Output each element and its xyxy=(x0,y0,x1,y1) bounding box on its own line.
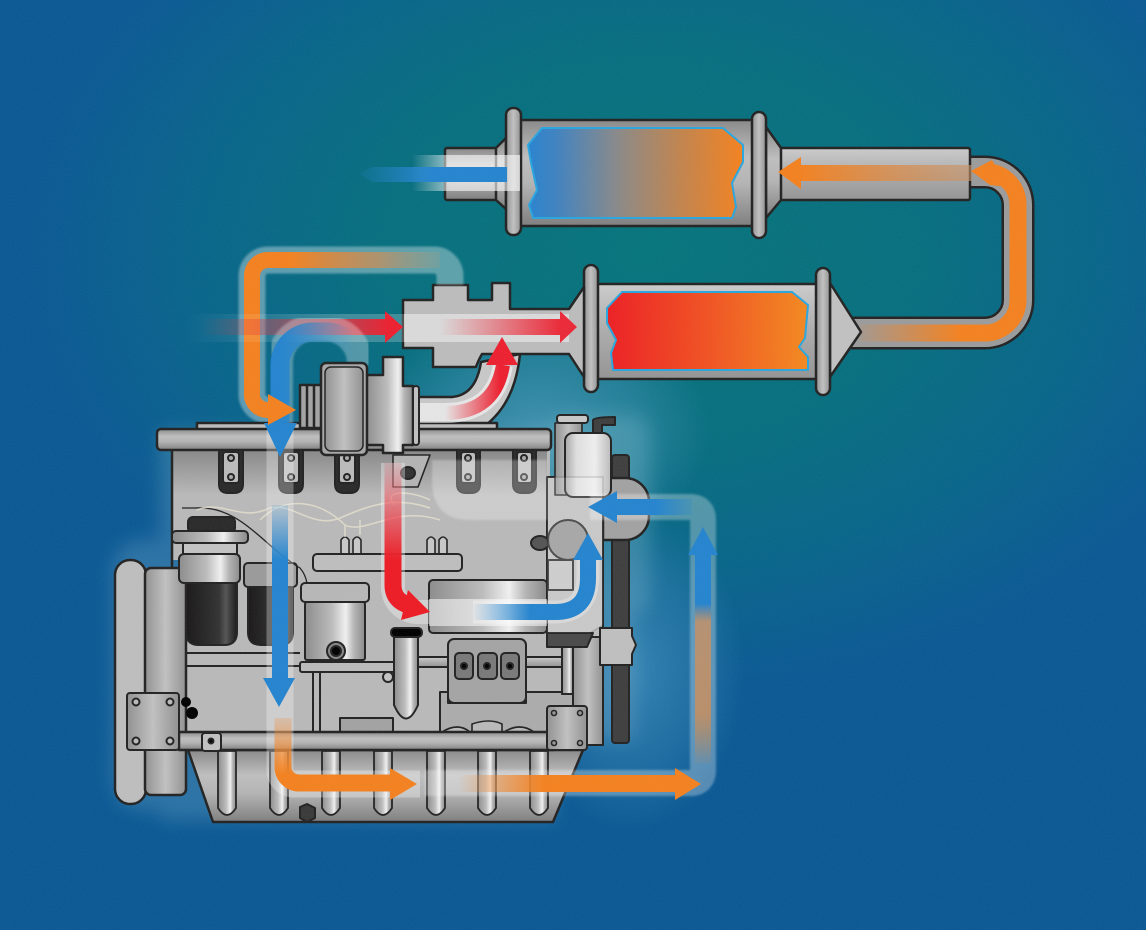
translucent water jacket overlay xyxy=(429,460,603,633)
rising fading arrow orange to blue xyxy=(688,527,718,763)
red curved arrow head xyxy=(486,337,518,365)
exhaust pipe from turbo xyxy=(418,354,520,428)
coolant neck xyxy=(555,415,588,495)
lower block step xyxy=(340,718,393,732)
radiator dark bar xyxy=(612,455,629,743)
cooler white band xyxy=(429,599,547,626)
black oil holes xyxy=(181,697,198,719)
dark nub xyxy=(531,536,549,550)
post xyxy=(562,647,573,694)
socket left xyxy=(455,653,473,679)
white blue flow vertical band and red drop halo xyxy=(280,430,703,784)
blue left arrow into housing xyxy=(588,491,692,523)
lower filter substrate red to orange xyxy=(607,292,808,370)
crank pulley xyxy=(115,560,146,804)
right tab xyxy=(600,628,636,665)
turbine cover xyxy=(325,367,363,451)
inlet pipe orange arrow xyxy=(778,157,972,189)
oil tube xyxy=(394,637,418,718)
block horizontal lines xyxy=(186,653,320,732)
oil pan xyxy=(188,750,583,822)
orange down-then-right arrow xyxy=(283,718,417,800)
socket middle xyxy=(478,653,497,679)
clamp 4 xyxy=(457,450,480,493)
filter 3 xyxy=(301,583,369,660)
red intake arrow xyxy=(185,311,405,343)
right dark foot xyxy=(547,633,593,647)
compressor xyxy=(366,357,413,453)
valve cover rear strip xyxy=(197,423,497,430)
filter 2 xyxy=(244,563,297,645)
engine block xyxy=(172,450,578,732)
manifold body xyxy=(403,283,584,377)
electrical box xyxy=(448,639,526,703)
blue curved arrow from cooler xyxy=(473,533,603,612)
manifold white flow band xyxy=(404,314,569,342)
red arrow to cooler xyxy=(393,463,430,620)
upper unit outlet cone xyxy=(496,138,506,209)
long orange arrow under engine xyxy=(458,768,701,800)
clamp 1 xyxy=(219,450,243,493)
upper unit inlet cone xyxy=(766,127,781,218)
right bracket xyxy=(547,706,587,750)
upper unit inlet pipe xyxy=(778,148,970,200)
dark hose hook xyxy=(593,417,615,433)
flange xyxy=(413,386,419,445)
injector rail xyxy=(313,537,462,571)
lower rail xyxy=(179,732,554,750)
block shading xyxy=(172,450,547,495)
upper filter substrate blue to orange xyxy=(528,128,743,218)
wiring harness xyxy=(197,493,440,537)
lower unit cone outlet xyxy=(830,283,861,377)
lower unit body xyxy=(596,284,818,379)
lower bumps xyxy=(442,721,534,732)
lower unit left flange xyxy=(584,265,598,392)
engine soft glow xyxy=(112,415,650,820)
turbine housing xyxy=(321,363,367,455)
fan hub xyxy=(145,568,186,795)
oil pan ribs xyxy=(218,751,548,815)
upper unit left flange xyxy=(506,108,521,235)
small bracket xyxy=(202,733,221,751)
back of intake pipe and turbo xyxy=(197,385,497,430)
mixer manifold and turbo exhaust pipe xyxy=(403,283,584,428)
connector orange flow xyxy=(860,172,1018,333)
round pump housing xyxy=(603,478,649,540)
blue arch head xyxy=(264,423,297,457)
turbo mount xyxy=(393,455,430,487)
support plate xyxy=(300,662,418,672)
clamp 5 xyxy=(513,450,536,493)
blue down arrow on engine xyxy=(263,505,295,707)
clamp 3 xyxy=(335,450,359,493)
outlet blue exhaust arrow xyxy=(359,155,520,191)
jacket base xyxy=(547,477,603,637)
left bracket xyxy=(127,693,179,750)
orange pre-turbo arrow with halo xyxy=(252,260,450,410)
filter 1 xyxy=(172,517,248,645)
white jacket band xyxy=(432,460,547,520)
coolant tank xyxy=(565,433,611,497)
clamp 2 xyxy=(279,450,303,493)
lower gray mount xyxy=(440,692,575,732)
upper unit right flange xyxy=(752,112,766,238)
red flow arrow in manifold xyxy=(440,311,577,343)
drain bolt xyxy=(300,804,315,822)
orange arrow head at turbo xyxy=(268,394,296,425)
tailpipe connector between units xyxy=(850,172,1018,333)
front housing xyxy=(573,635,603,745)
filter wire xyxy=(182,508,307,584)
right side box xyxy=(548,560,573,590)
valve cover rail xyxy=(157,429,551,450)
lower diesel oxidation catalyst xyxy=(584,265,861,395)
cooler cylinder xyxy=(429,580,547,633)
red curved arrow from turbo xyxy=(418,365,503,413)
upper diesel particulate filter xyxy=(445,108,970,238)
lower unit right flange xyxy=(816,268,830,395)
diesel engine xyxy=(115,415,649,822)
thermostat housing xyxy=(548,520,588,560)
tube fitting xyxy=(383,672,393,682)
oil tube cap xyxy=(391,628,422,637)
blue arch arrow with halo xyxy=(280,328,360,425)
socket right xyxy=(501,653,519,679)
upper unit outlet pipe xyxy=(445,148,500,200)
connector arrow head xyxy=(971,160,1008,187)
block outline xyxy=(171,450,173,570)
turbocharger xyxy=(321,357,419,455)
upper unit body xyxy=(520,120,753,226)
rod xyxy=(418,657,568,667)
turbo intake grille xyxy=(300,385,322,428)
